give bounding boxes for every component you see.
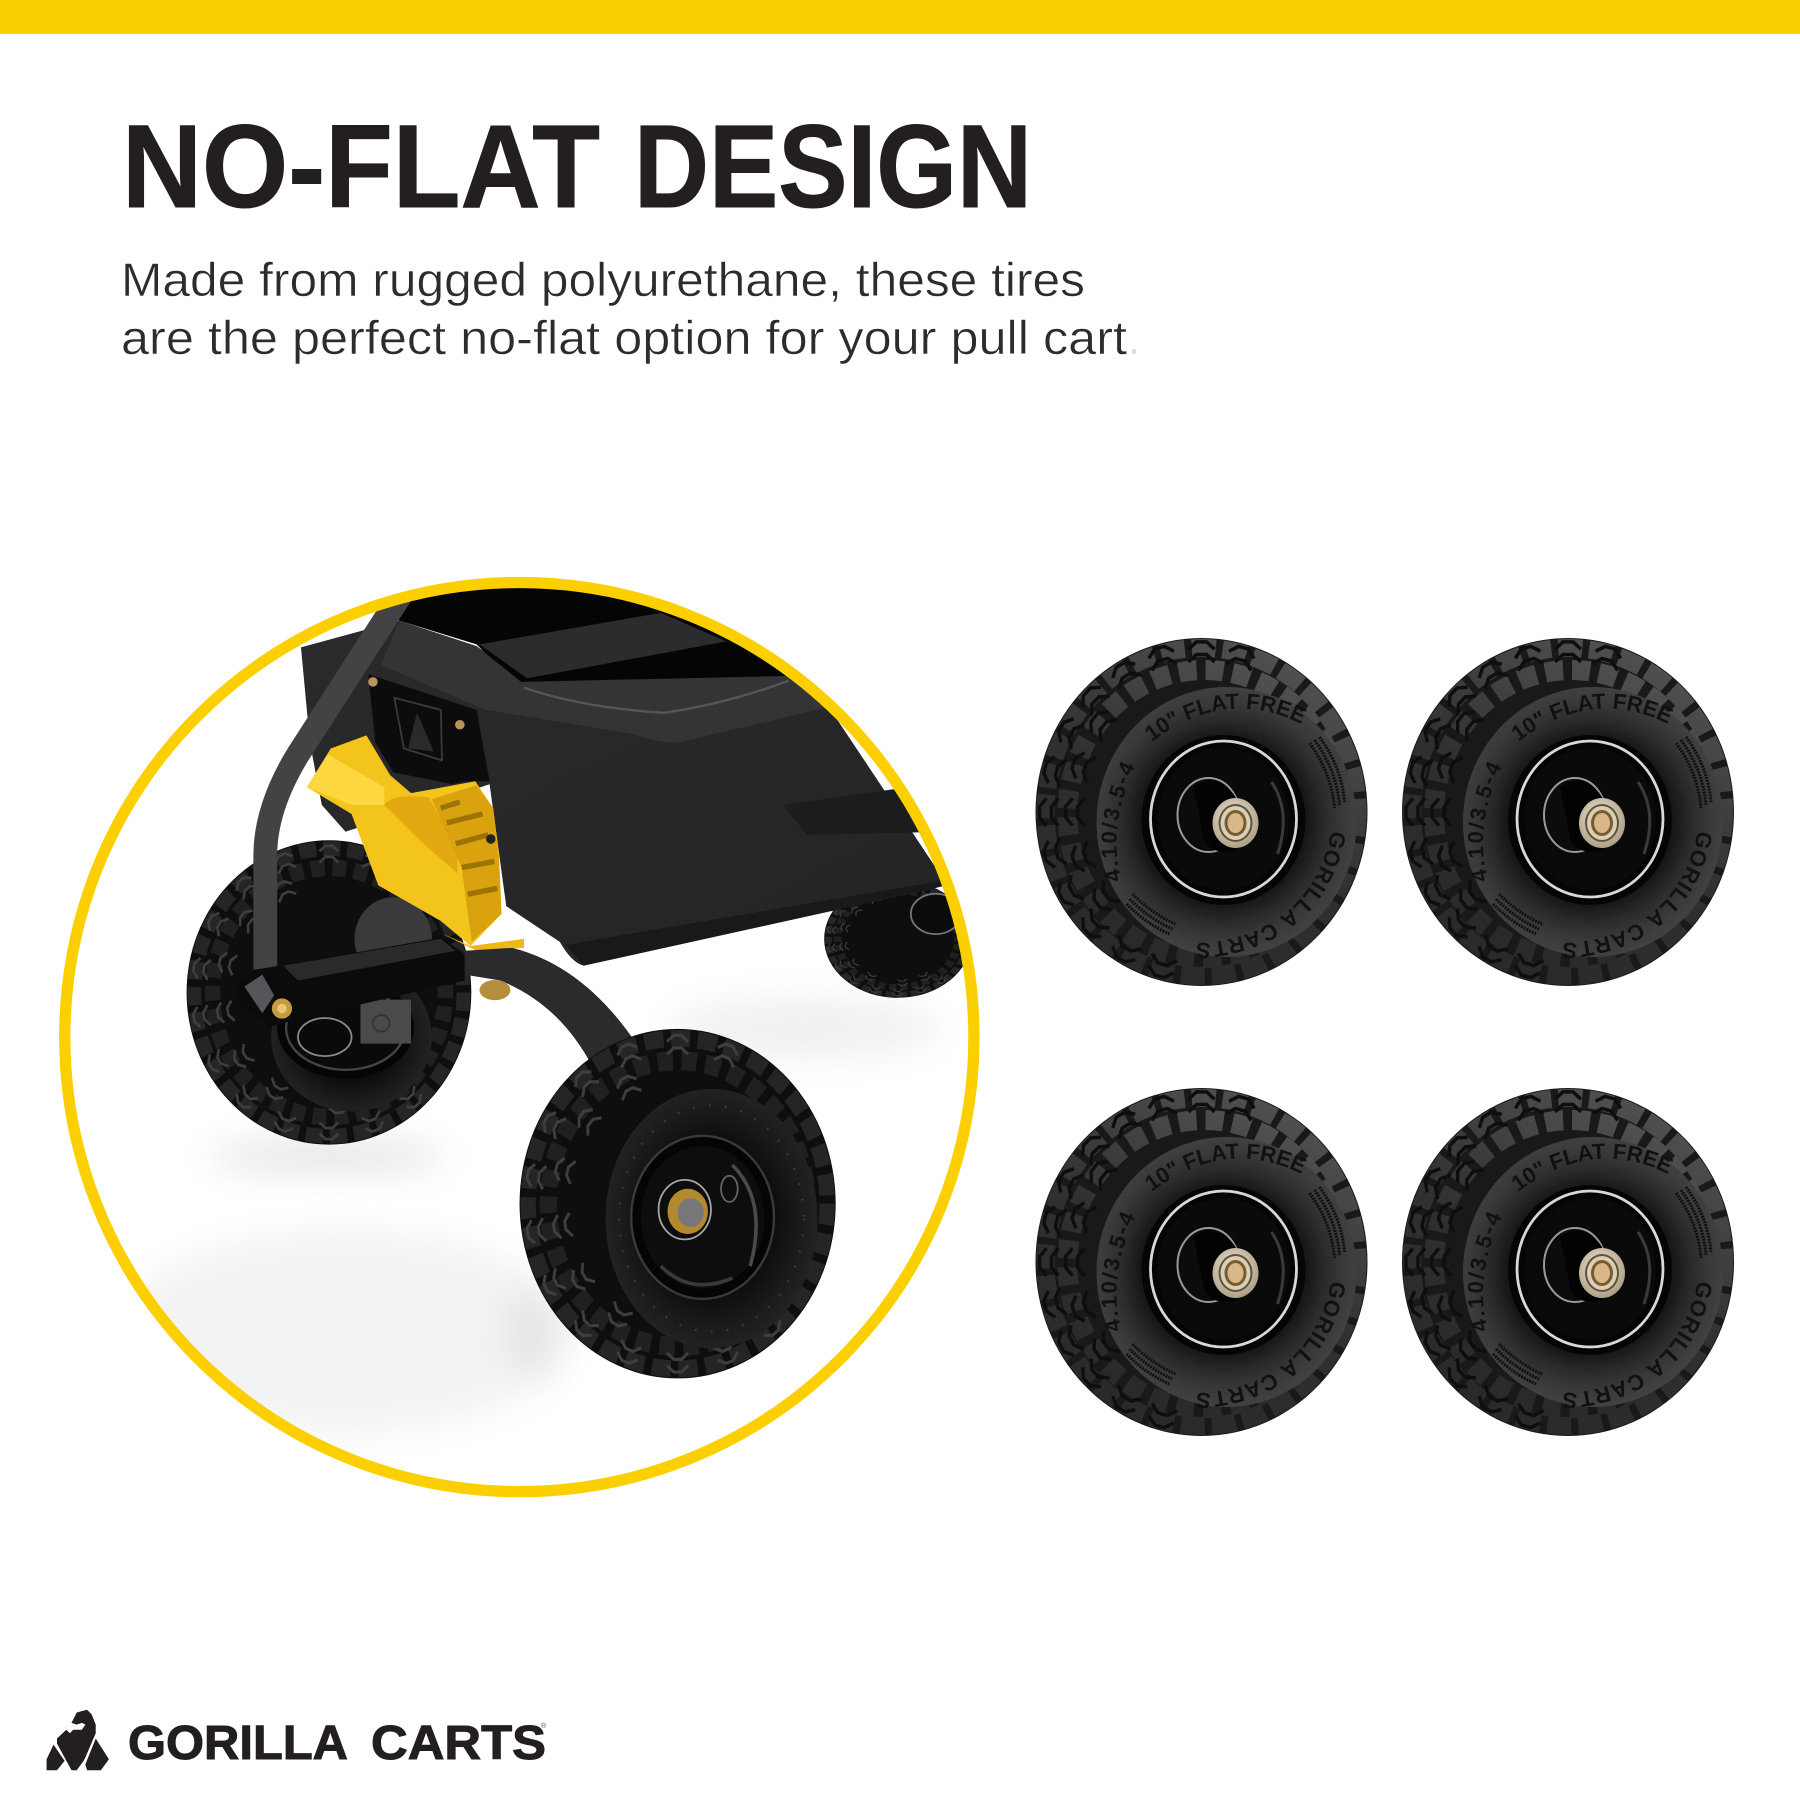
far right wheel xyxy=(824,888,963,998)
top yellow bar xyxy=(0,0,1800,34)
photo contents xyxy=(151,588,963,1424)
tire bottom left: GORILLA CARTS xyxy=(1197,1282,1345,1408)
tire bottom left xyxy=(1036,1088,1368,1436)
tire bottom right: 10" FLAT FREE xyxy=(1512,1143,1674,1191)
description text: Made from rugged polyurethane, these tires xyxy=(121,253,1085,306)
tire top right xyxy=(1402,638,1734,986)
tire top right: GORILLA CARTS xyxy=(1564,832,1712,958)
tire top left: 10" FLAT FREE xyxy=(1146,693,1307,741)
tire top right: 4.10/3.5-4 xyxy=(1468,762,1501,881)
tire top left xyxy=(1036,638,1368,986)
tire bottom right xyxy=(1402,1088,1734,1436)
icon: gorilla mark xyxy=(47,1710,109,1770)
title: DESIGN xyxy=(634,101,1032,233)
description text: are the perfect no-flat option for your pull cart . xyxy=(121,311,1141,364)
brand name xyxy=(128,1717,546,1770)
rear wheel xyxy=(187,840,471,1145)
tire top left: GORILLA CARTS xyxy=(1197,832,1345,958)
yellow bracket xyxy=(307,735,524,951)
brand name: GORILLA xyxy=(128,1717,348,1770)
tire bottom right: 4.10/3.5-4 xyxy=(1468,1212,1501,1331)
tire top left: 4.10/3.5-4 xyxy=(1101,762,1134,881)
yellow circle ring xyxy=(65,582,974,1492)
registered mark: ® xyxy=(541,1722,547,1730)
brand logo xyxy=(47,1710,547,1770)
tire bottom left: 4.10/3.5-4 xyxy=(1101,1212,1134,1331)
brand name: CARTS xyxy=(371,1717,546,1770)
bronze nut xyxy=(479,980,510,1000)
panel: circular cart wheel photo xyxy=(60,570,988,1504)
cart tub xyxy=(301,585,950,966)
tire bottom left: 10" FLAT FREE xyxy=(1146,1143,1307,1191)
front wheel xyxy=(520,1029,836,1378)
curved axle arm xyxy=(465,948,636,1067)
cross bar xyxy=(236,938,465,1027)
handle tube xyxy=(265,579,411,986)
description text xyxy=(121,253,1141,364)
tire bottom right: GORILLA CARTS xyxy=(1564,1282,1712,1408)
side plate with logo xyxy=(368,674,490,784)
tire top right: 10" FLAT FREE xyxy=(1512,693,1674,741)
title xyxy=(122,101,1032,233)
title: NO-FLAT xyxy=(122,101,600,233)
